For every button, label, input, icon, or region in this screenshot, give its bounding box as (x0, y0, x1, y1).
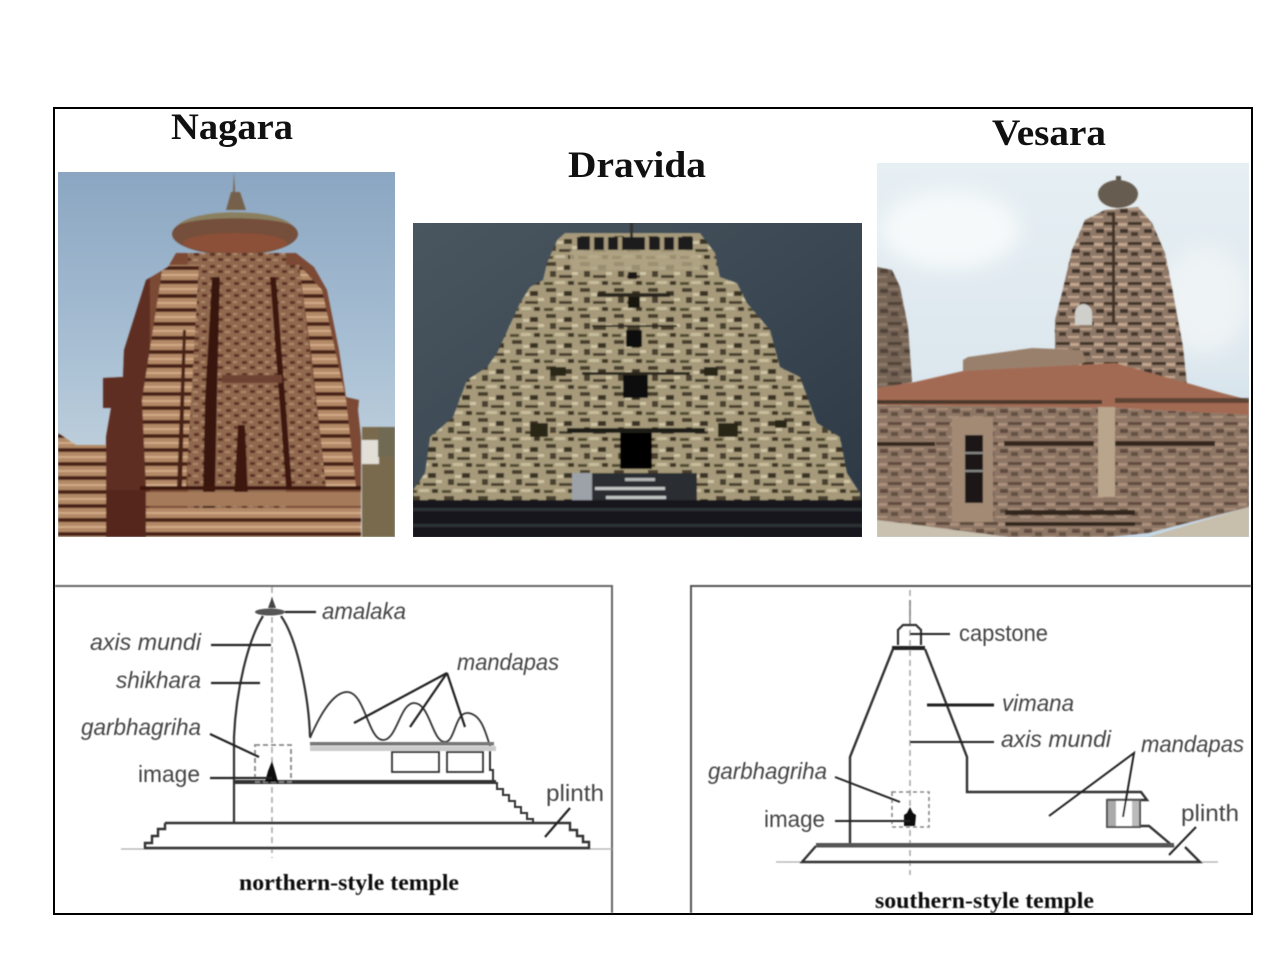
label: axis mundi: axis mundi (90, 629, 202, 655)
label: vimana: vimana (1002, 690, 1074, 716)
axis line (271, 587, 273, 858)
garbhagriha dashed box (892, 792, 929, 827)
label: mandapas: mandapas (457, 649, 559, 675)
temple architecture figure (53, 107, 1253, 915)
leader lines (210, 612, 570, 837)
ground line (121, 848, 612, 850)
plinth top (816, 843, 1174, 848)
label: image: image (764, 806, 825, 832)
axis line (909, 590, 911, 875)
label: garbhagriha: garbhagriha (81, 714, 201, 740)
southern mandapa (1107, 800, 1140, 827)
panel border (55, 586, 612, 913)
panel border (691, 586, 1251, 913)
amalaka cap (255, 597, 285, 616)
leader lines (835, 634, 1196, 855)
panel: northern-style temple diagram (55, 586, 612, 913)
photo: Vesara temple (877, 163, 1250, 537)
heading: Dravida: Dravida (568, 145, 706, 186)
garbhagriha dashed box (255, 745, 291, 782)
outer frame (54, 108, 1252, 914)
photo: Nagara temple (58, 172, 395, 537)
label: plinth: plinth (546, 780, 604, 806)
label: garbhagriha: garbhagriha (708, 758, 827, 784)
northern temple outline (145, 616, 589, 848)
caption: southern-style temple: southern-style temple (875, 888, 1094, 913)
heading: Vesara: Vesara (992, 113, 1106, 154)
label: amalaka: amalaka (322, 598, 406, 624)
label: capstone: capstone (959, 620, 1048, 646)
southern temple outline (802, 649, 1200, 862)
mandapa roof bar (310, 742, 496, 751)
label: image: image (138, 761, 200, 787)
heading: Nagara: Nagara (171, 107, 293, 148)
label: mandapas: mandapas (1141, 731, 1244, 757)
label: shikhara: shikhara (116, 667, 201, 693)
label: axis mundi: axis mundi (1001, 726, 1112, 752)
floor line (234, 780, 496, 784)
image icon (904, 807, 916, 826)
panel: southern-style temple diagram (691, 586, 1251, 913)
ground line (776, 861, 1218, 863)
label: plinth: plinth (1181, 800, 1239, 826)
caption: northern-style temple: northern-style temple (239, 870, 459, 895)
photo: Dravida temple (413, 223, 862, 537)
image icon (265, 761, 278, 782)
capstone (892, 600, 925, 650)
